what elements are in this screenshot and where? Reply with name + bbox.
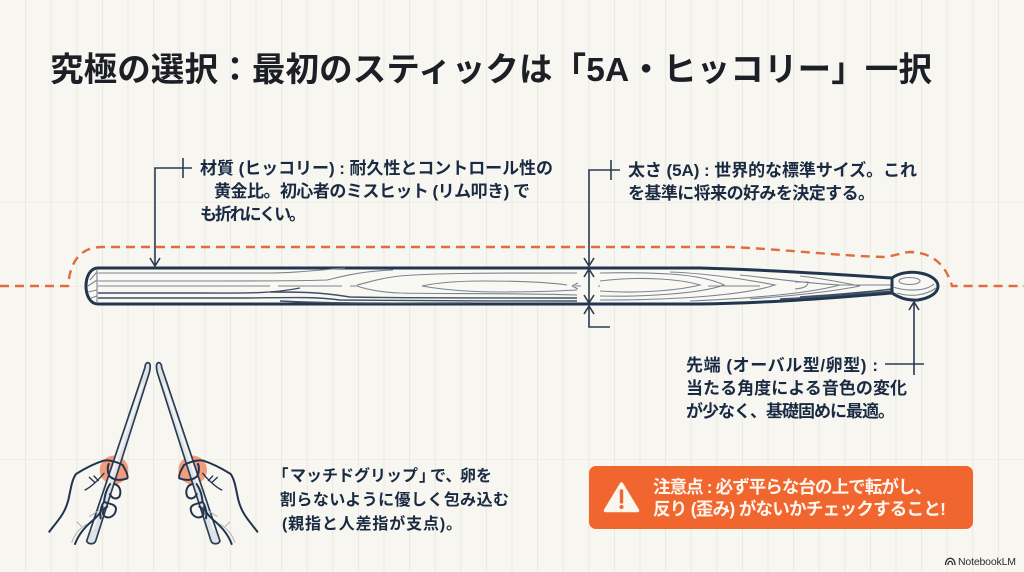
text: material: も折れにくい。 xyxy=(200,205,306,224)
warning text xyxy=(653,477,946,519)
warning text: 反り (歪み) がないかチェックすること! xyxy=(653,499,946,519)
text: tip: 当たる角度による音色の変化 xyxy=(686,378,907,398)
text: grip explanation: マッチドグリップ xyxy=(290,466,418,485)
NotebookLM wordmark: NotebookLM xyxy=(958,556,1016,568)
text: tip: 先端 (オーバル型/卵型) : xyxy=(686,356,878,375)
NotebookLM credit xyxy=(946,556,1016,568)
dimension arrows: thickness xyxy=(584,160,620,327)
callout: tip xyxy=(686,302,924,421)
icon: NotebookLM logo xyxy=(946,558,955,565)
right hand and stick xyxy=(156,363,257,544)
text: thickness xyxy=(628,160,917,203)
title: 究極の選択：最初のスティックは「5A・ヒッコリー」一択 xyxy=(50,52,932,89)
oval tip xyxy=(892,272,938,300)
drumstick illustration xyxy=(86,268,938,304)
text: grip explanation: (親指と人差指が支点)。 xyxy=(282,514,462,533)
left hand and stick xyxy=(49,363,150,544)
icon: matched grip hands xyxy=(49,363,257,544)
white gap behind dimension arrows xyxy=(581,270,598,302)
text: thickness: 太さ (5A) : 世界的な標準サイズ。これ xyxy=(628,160,917,180)
text: thickness: を基準に将来の好みを決定する。 xyxy=(628,183,875,203)
dashed outline around stick xyxy=(0,247,1024,286)
text: grip explanation: 」 xyxy=(419,468,435,485)
leader arrow: tip xyxy=(885,302,924,375)
text: material xyxy=(200,159,553,224)
icon: warning triangle xyxy=(606,484,638,510)
text: grip explanation: で、 xyxy=(430,468,461,485)
callout: thickness xyxy=(581,160,917,327)
text: material: 黄金比。初心者のミスヒット (リム叩き) で xyxy=(214,181,530,201)
callout: warning xyxy=(589,466,973,529)
text: grip explanation: 「 xyxy=(272,467,289,485)
warning panel xyxy=(589,466,973,529)
text: grip explanation: 割らないように優しく包み込む xyxy=(280,490,509,509)
text: tip: が少なく、基礎固めに最適。 xyxy=(686,401,895,421)
wood grain xyxy=(88,268,892,303)
text: tip xyxy=(686,356,907,421)
warning text: 注意点 : 必ず平らな台の上で転がし、 xyxy=(653,477,932,497)
text: grip explanation xyxy=(272,466,509,533)
stick body xyxy=(86,268,892,304)
callout: material xyxy=(150,158,553,266)
text: material: 材質 (ヒッコリー) : 耐久性とコントロール性の xyxy=(200,159,553,178)
text: grip explanation: 卵を xyxy=(460,466,492,485)
leader arrow: material xyxy=(150,158,192,266)
